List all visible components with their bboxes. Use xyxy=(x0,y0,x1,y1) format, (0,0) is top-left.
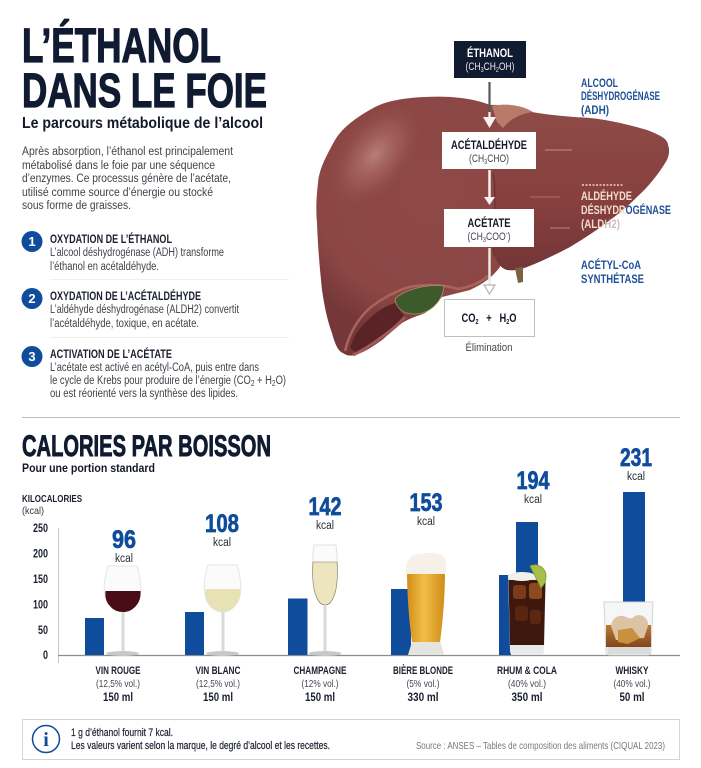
enzyme label: ALDH2: ALDÉHYDE xyxy=(581,188,632,203)
enzyme label: acetyl-CoA synthetase xyxy=(581,257,644,286)
drink: champagne xyxy=(288,493,346,704)
step 1 xyxy=(22,231,224,273)
category label: BIÈRE BLONDE xyxy=(393,664,453,677)
subtitle: Le parcours métabolique de l’alcool xyxy=(22,115,263,132)
intro text block: métabolisé dans le foie par une séquence xyxy=(22,160,215,172)
value: 96 xyxy=(112,526,136,554)
category label xyxy=(393,664,453,704)
y axis: 100 xyxy=(33,600,48,612)
flow box: acetaldehyde: (CH xyxy=(469,153,489,165)
enzyme label: ADH: ALCOOL xyxy=(581,76,618,90)
flow box: acetaldehyde: CHO) xyxy=(487,153,509,165)
icon: inferior cavity xyxy=(350,303,405,353)
drink: rhum et cola xyxy=(497,467,557,704)
category label: WHISKY xyxy=(616,665,649,677)
step 3: ou est réorienté vers la synthèse des lipides. xyxy=(50,388,238,400)
step 3: + H xyxy=(254,375,272,387)
step 1: l’éthanol en acétaldéhyde. xyxy=(50,261,159,273)
category label: 150 ml xyxy=(103,690,133,704)
step 3: L’acétate est activé en acétyl-CoA, puis entre dans xyxy=(50,362,259,374)
step 3 xyxy=(22,346,286,400)
flow box: acetate: (CH xyxy=(468,231,487,243)
icon: info: i xyxy=(43,729,49,751)
step 2 xyxy=(22,288,240,330)
category label xyxy=(497,665,557,704)
drink: rhum et cola: kcal xyxy=(524,494,542,506)
value: 108 xyxy=(205,510,239,538)
icon: ligament xyxy=(492,105,533,128)
y axis: 50 xyxy=(38,625,48,637)
enzyme label: acetyl-CoA synthetase: SYNTHÉTASE xyxy=(581,271,644,286)
enzyme label: ADH: DÉSHYDROGÉNASE xyxy=(581,88,660,103)
flow box: acetate: ) xyxy=(508,231,510,243)
flow box: ethanol: ÉTHANOL xyxy=(467,45,513,60)
flow box: ethanol: CH xyxy=(484,61,496,73)
category label xyxy=(196,665,241,704)
step 2: 2 xyxy=(28,291,36,306)
step 3: 3 xyxy=(28,349,36,364)
step 3: ACTIVATION DE L’ACÉTATE xyxy=(50,348,172,361)
title: DANS LE FOIE xyxy=(22,65,267,118)
note text: 1 g d’éthanol fournit 7 kcal. xyxy=(71,727,173,739)
value: 153 xyxy=(410,489,442,517)
category label: 150 ml xyxy=(305,690,335,704)
step 1: 1 xyxy=(28,234,36,249)
flow box: CO2 and water: CO xyxy=(462,311,480,325)
drink: champagne: kcal xyxy=(316,520,334,532)
flow box: acetaldehyde xyxy=(442,132,536,169)
intro text block: sous forme de graisses. xyxy=(22,200,131,212)
flow box: CO2 and water xyxy=(444,300,534,336)
category label: RHUM & COLA xyxy=(497,665,557,677)
category label xyxy=(614,665,650,704)
step 3: 2 xyxy=(251,379,255,388)
intro text block: Après absorption, l’éthanol est principalement xyxy=(22,146,234,158)
value: 142 xyxy=(308,493,342,521)
y axis xyxy=(33,523,680,663)
category label: (5% vol.) xyxy=(406,678,440,690)
flow box: CO2 and water: 2 xyxy=(506,319,509,326)
category label: (12,5% vol.) xyxy=(196,678,240,690)
enzyme label: ALDH2: (ALDH2) xyxy=(581,217,620,231)
step 1: OXYDATION DE L’ÉTHANOL xyxy=(50,233,172,246)
icon: gallbladder xyxy=(395,286,444,314)
category label: 150 ml xyxy=(203,690,233,704)
flow box: acetate: - xyxy=(506,231,508,238)
footer note panel xyxy=(22,720,680,760)
category label xyxy=(294,665,346,704)
enzyme label: ALDH2: DÉSHYDROGÉNASE xyxy=(581,202,671,217)
drink: whisky xyxy=(604,444,653,704)
intro text block: utilisé comme source d’énergie ou stocké xyxy=(22,187,213,199)
drink: vin blanc xyxy=(185,510,241,704)
enzyme label: ALDH2 xyxy=(581,188,671,231)
drink: bière blonde: kcal xyxy=(417,516,435,528)
icon: info xyxy=(32,726,60,752)
flow box: acetaldehyde: ACÉTALDÉHYDE xyxy=(451,137,527,152)
intro text block: d’enzymes. Ce processus génère de l’acétate, xyxy=(22,173,231,185)
category label: (12,5% vol.) xyxy=(96,678,140,690)
icon: beer glass xyxy=(406,553,446,655)
icon: whisky tumbler xyxy=(604,602,653,655)
enzyme label: acetyl-CoA synthetase: ACÉTYL-CoA xyxy=(581,257,641,272)
flow box: ethanol: 3 xyxy=(481,67,484,74)
icon: white wine glass xyxy=(204,565,241,656)
chart axis title: KILOCALORIES xyxy=(22,493,82,505)
enzyme label: ADH: (ADH) xyxy=(581,103,609,117)
intro text block xyxy=(22,146,234,212)
category label xyxy=(96,665,140,704)
icon: vessel stub xyxy=(515,267,523,283)
drink: vin rouge: kcal xyxy=(115,553,133,565)
flow box: ethanol: (CH xyxy=(466,61,485,73)
step 2: OXYDATION DE L’ACÉTALDÉHYDE xyxy=(50,290,201,303)
drink: bière blonde xyxy=(391,489,453,704)
category label: (12% vol.) xyxy=(302,678,338,690)
enzyme label: ADH xyxy=(581,76,660,117)
icon: red wine glass xyxy=(104,566,141,656)
flow arrow: ethanol to acetaldehyde xyxy=(483,82,496,128)
y axis: 150 xyxy=(33,574,48,586)
elimination label: Élimination xyxy=(466,341,512,354)
category label: 50 ml xyxy=(620,690,644,704)
flow arrow: acetaldehyde to acetate xyxy=(484,170,495,205)
flow box: CO2 and water: + H xyxy=(479,311,506,325)
flow box: ethanol xyxy=(454,41,526,78)
step 3: le cycle de Krebs pour produire de l’énergie (CO xyxy=(50,375,296,387)
note text xyxy=(71,727,330,752)
flow box: acetate: ACÉTATE xyxy=(468,215,510,230)
drink: whisky: kcal xyxy=(627,471,645,483)
flow box: acetaldehyde: 3 xyxy=(484,159,487,166)
flow box: acetate: COO xyxy=(486,231,506,243)
value: 194 xyxy=(516,467,550,495)
section heading: CALORIES PAR BOISSON xyxy=(22,430,271,463)
liver illustration xyxy=(308,84,669,356)
category label: CHAMPAGNE xyxy=(294,665,346,677)
drink: vin blanc: kcal xyxy=(213,537,231,549)
icon: champagne flute xyxy=(308,545,342,656)
flow arrow: acetate to CO2 xyxy=(484,248,495,294)
flow box: CO2 and water: 2 xyxy=(475,319,479,326)
icon: lime wedge xyxy=(530,565,546,588)
category label: 330 ml xyxy=(408,690,438,704)
y axis: 250 xyxy=(33,523,48,535)
section subtitle: Pour une portion standard xyxy=(22,461,155,475)
y axis: 200 xyxy=(33,548,48,560)
drink: vin rouge xyxy=(85,526,141,704)
category label: (40% vol.) xyxy=(508,678,546,690)
chart axis title xyxy=(22,493,82,517)
flow box: acetate: 3 xyxy=(483,237,486,244)
icon: cola glass xyxy=(508,565,546,655)
flow box: ethanol: OH) xyxy=(499,61,514,73)
category label: 350 ml xyxy=(512,690,542,704)
flow box: ethanol: 2 xyxy=(496,67,499,74)
step 2: l’acétaldéhyde, toxique, en acétate. xyxy=(50,318,199,330)
flow box: acetate xyxy=(444,209,534,247)
category label: (40% vol.) xyxy=(614,678,650,690)
title xyxy=(22,19,267,118)
step 1: L’alcool déshydrogénase (ADH) transforme xyxy=(50,247,224,259)
category label: VIN BLANC xyxy=(196,665,241,677)
title: L’ÉTHANOL xyxy=(22,19,221,73)
step 2: L’aldéhyde déshydrogénase (ALDH2) convertit xyxy=(50,304,240,316)
chart axis title: (kcal) xyxy=(22,505,44,517)
step 3: 2 xyxy=(272,379,276,388)
y axis: 0 xyxy=(43,650,48,662)
value: 231 xyxy=(620,444,652,472)
category label: VIN ROUGE xyxy=(96,665,140,677)
note text: Les valeurs varient selon la marque, le degré d’alcool et les recettes. xyxy=(71,740,330,752)
flow box: CO2 and water: O xyxy=(509,311,516,325)
step 3: O) xyxy=(276,375,286,387)
